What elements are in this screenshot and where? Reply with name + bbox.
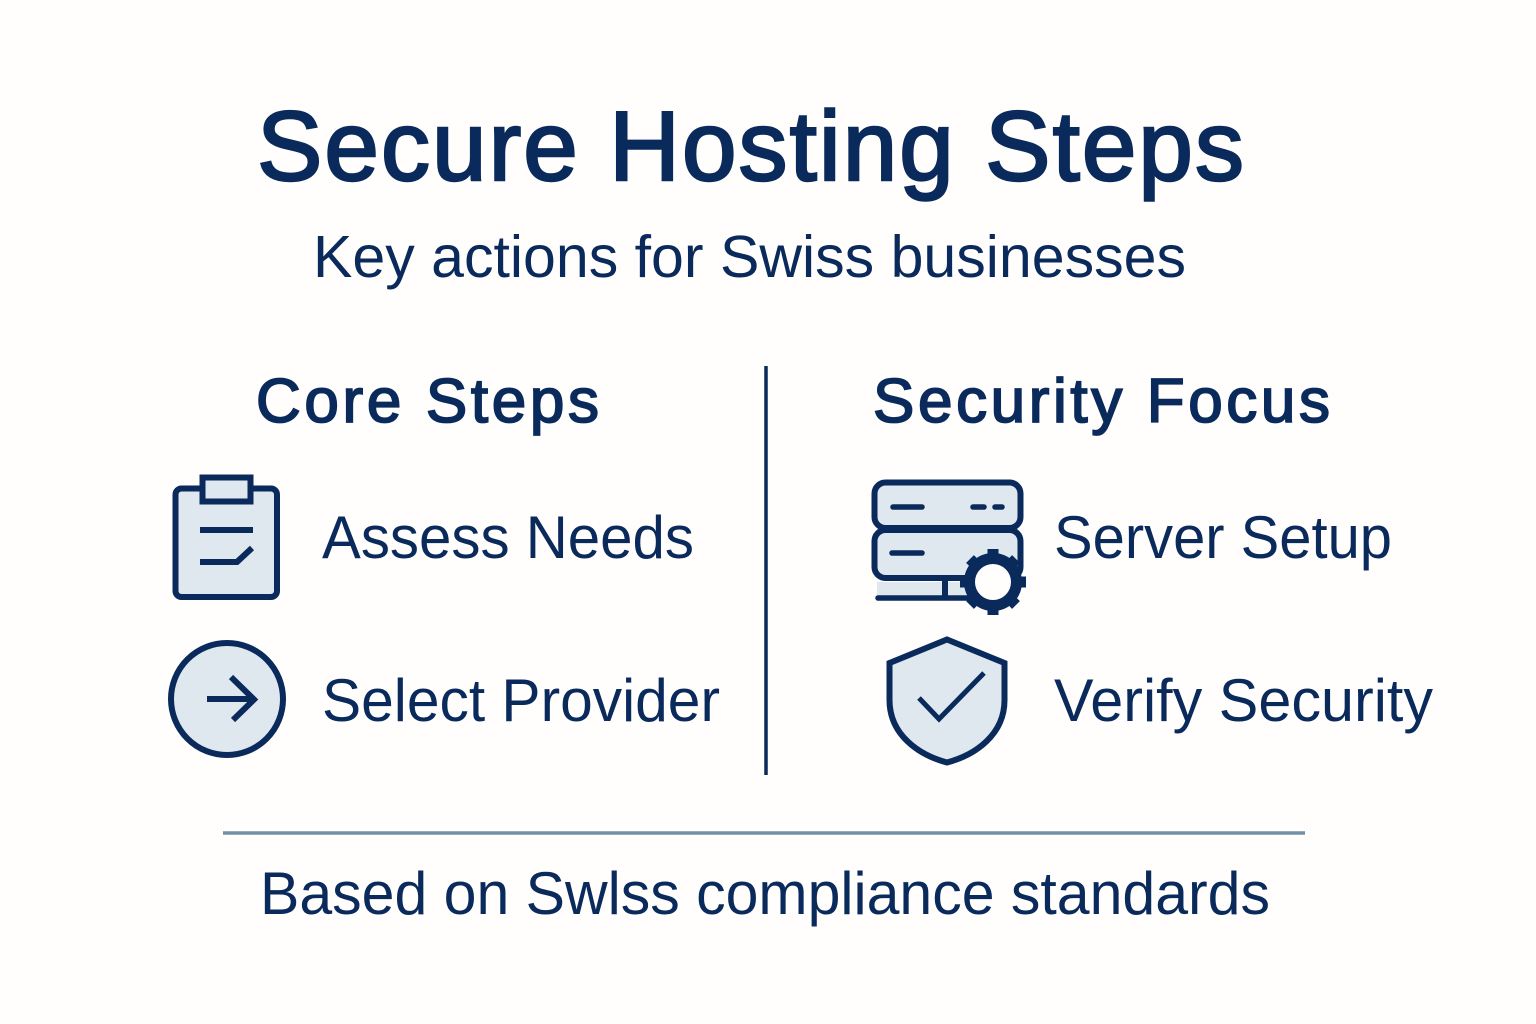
heading: security focus: Security Focus [873,367,1330,436]
title: Secure Hosting Steps [257,91,1244,201]
label: assess needs: Assess Needs [322,504,694,571]
icon: clipboard [176,478,277,597]
icon: server with gear [874,482,1026,615]
label: verify security: Verify Security [1054,667,1433,734]
footer note: Based on Swlss compliance standards [260,860,1270,927]
icon: arrow in circle [171,643,283,755]
icon: shield with check [890,640,1004,762]
label: select provider: Select Provider [322,667,720,734]
heading: core steps: Core Steps [256,367,599,436]
label: server setup: Server Setup [1054,504,1392,571]
subtitle: Key actions for Swiss businesses [313,224,1186,290]
